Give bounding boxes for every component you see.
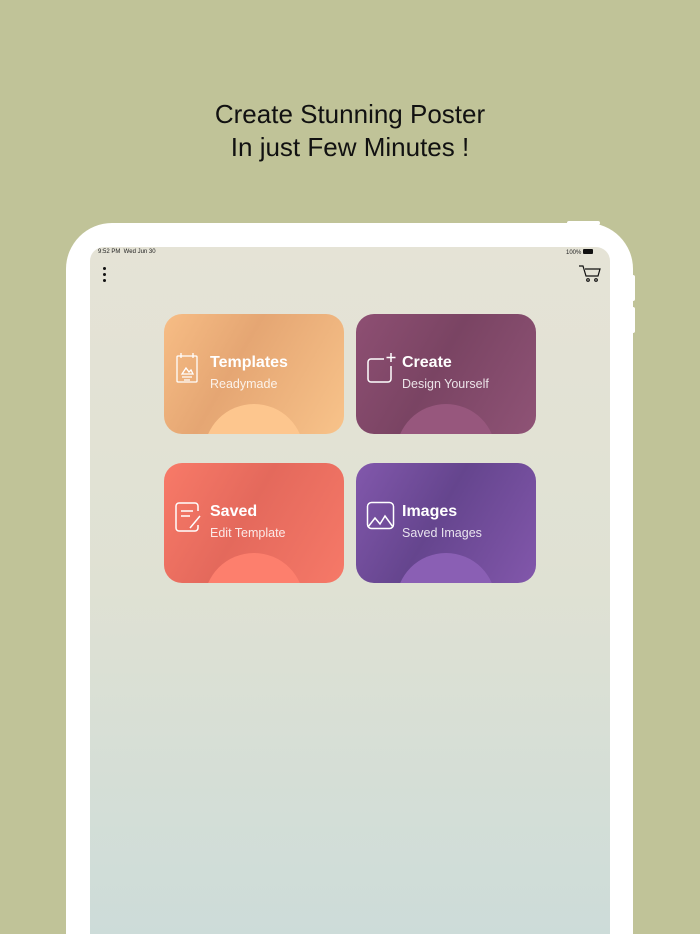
status bar: 9:52 PM Wed Jun 30: [98, 249, 156, 255]
title: In just Few Minutes !: [231, 132, 469, 162]
icon: cart: [579, 265, 601, 282]
card: Create: [356, 314, 536, 434]
card: Templates: Templates: [210, 354, 288, 371]
status bar: [98, 248, 593, 256]
card: Saved: [164, 463, 344, 583]
icon: menu dots: [103, 267, 106, 282]
screen: [90, 247, 610, 934]
title: [215, 99, 485, 162]
card: Create: Design Yourself: [402, 377, 489, 391]
tablet side buttons: [567, 221, 635, 333]
card: Templates: Readymade: [210, 377, 277, 391]
icon: images: [366, 502, 394, 530]
card: Images: [356, 463, 536, 583]
card: Templates: [164, 314, 344, 434]
tablet frame: [66, 223, 633, 934]
icon: create: [367, 353, 396, 383]
card: Images: Saved Images: [402, 526, 482, 540]
title: Create Stunning Poster: [215, 99, 485, 129]
card: Saved: Edit Template: [210, 526, 286, 540]
card: Saved: Saved: [210, 503, 257, 520]
icon: saved: [175, 502, 200, 532]
status bar: 100%: [566, 250, 581, 256]
card: Create: Create: [402, 354, 452, 371]
card: Images: Images: [402, 503, 457, 520]
icon: templates: [176, 353, 198, 383]
